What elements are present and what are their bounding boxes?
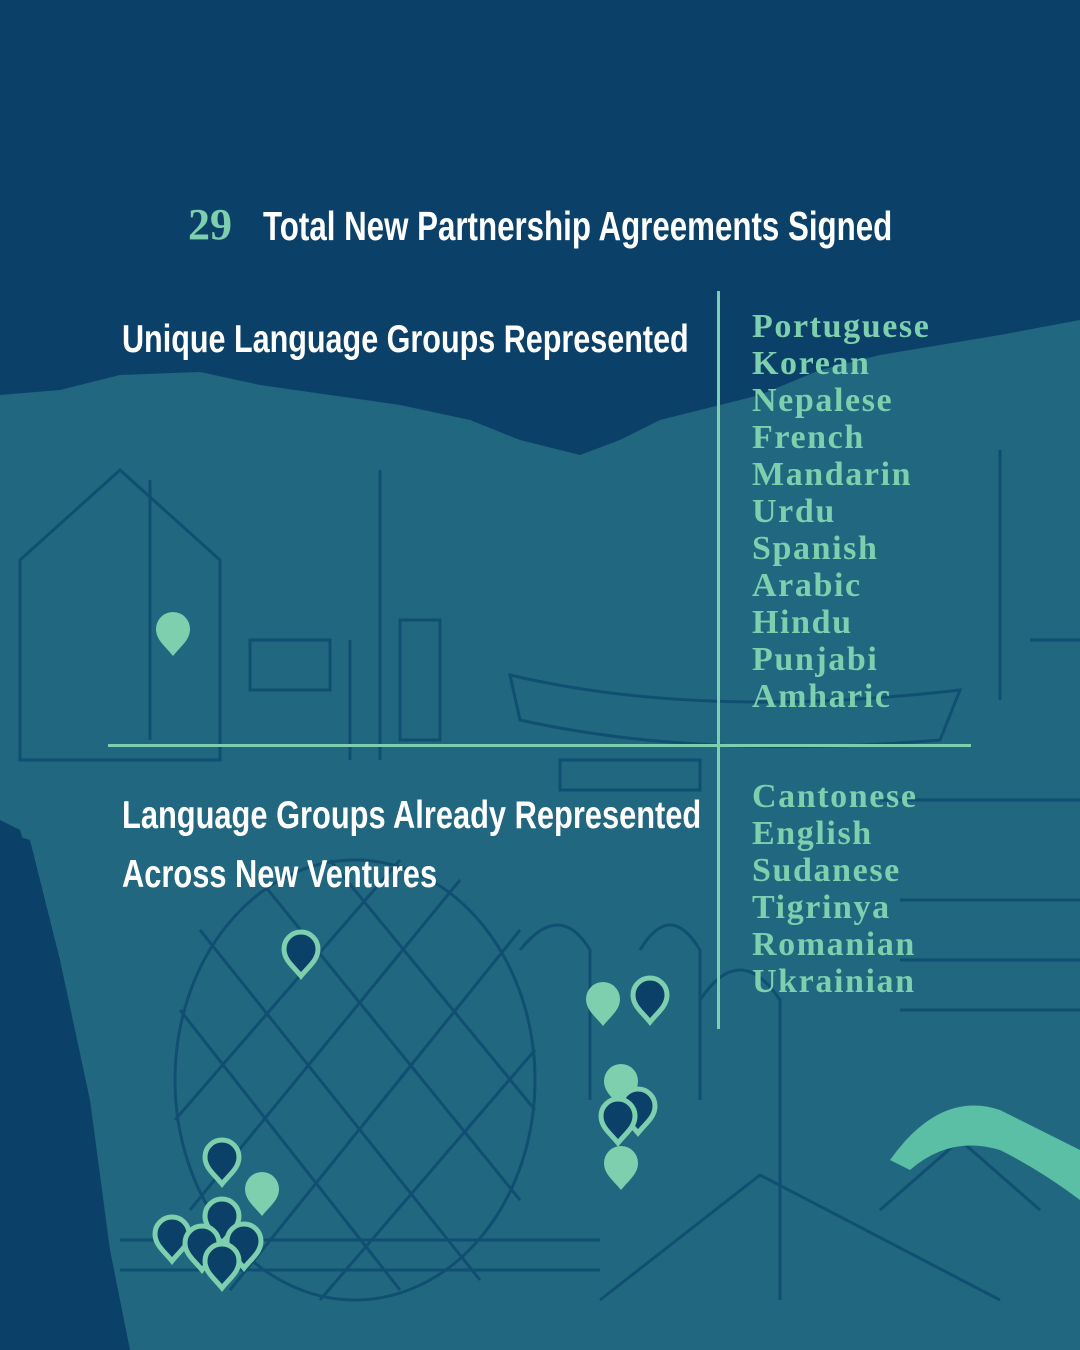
list: unique languages <box>752 308 930 715</box>
list: already represented languages: Sudanese <box>752 852 901 889</box>
list: unique languages: Spanish <box>752 530 879 567</box>
dark left silhouette <box>0 830 125 1350</box>
title: 29 <box>188 200 232 249</box>
list: unique languages: Hindu <box>752 604 853 641</box>
title: Total New Partnership Agreements Signed <box>263 203 892 249</box>
list: already represented languages: Ukrainian <box>752 963 916 1000</box>
heading: unique language groups: Unique Language Groups Represented <box>122 318 689 361</box>
heading: already represented: Language Groups Already Represented <box>122 794 701 837</box>
list: unique languages: Korean <box>752 345 871 382</box>
list: unique languages: Mandarin <box>752 456 912 493</box>
list: already represented languages <box>752 778 918 1000</box>
list: unique languages: Urdu <box>752 493 836 530</box>
list: already represented languages: Romanian <box>752 926 916 963</box>
list: unique languages: Punjabi <box>752 641 878 678</box>
heading: already represented <box>122 794 701 896</box>
list: unique languages: French <box>752 419 865 456</box>
list: unique languages: Amharic <box>752 678 892 715</box>
list: unique languages: Portuguese <box>752 308 930 345</box>
list: already represented languages: Tigrinya <box>752 889 891 926</box>
list: unique languages: Nepalese <box>752 382 893 419</box>
heading: already represented: Across New Ventures <box>122 853 437 896</box>
list: already represented languages: Cantonese <box>752 778 918 815</box>
divider lines <box>717 291 720 1029</box>
brush stroke <box>890 1106 1080 1200</box>
list: already represented languages: English <box>752 815 873 852</box>
list: unique languages: Arabic <box>752 567 862 604</box>
